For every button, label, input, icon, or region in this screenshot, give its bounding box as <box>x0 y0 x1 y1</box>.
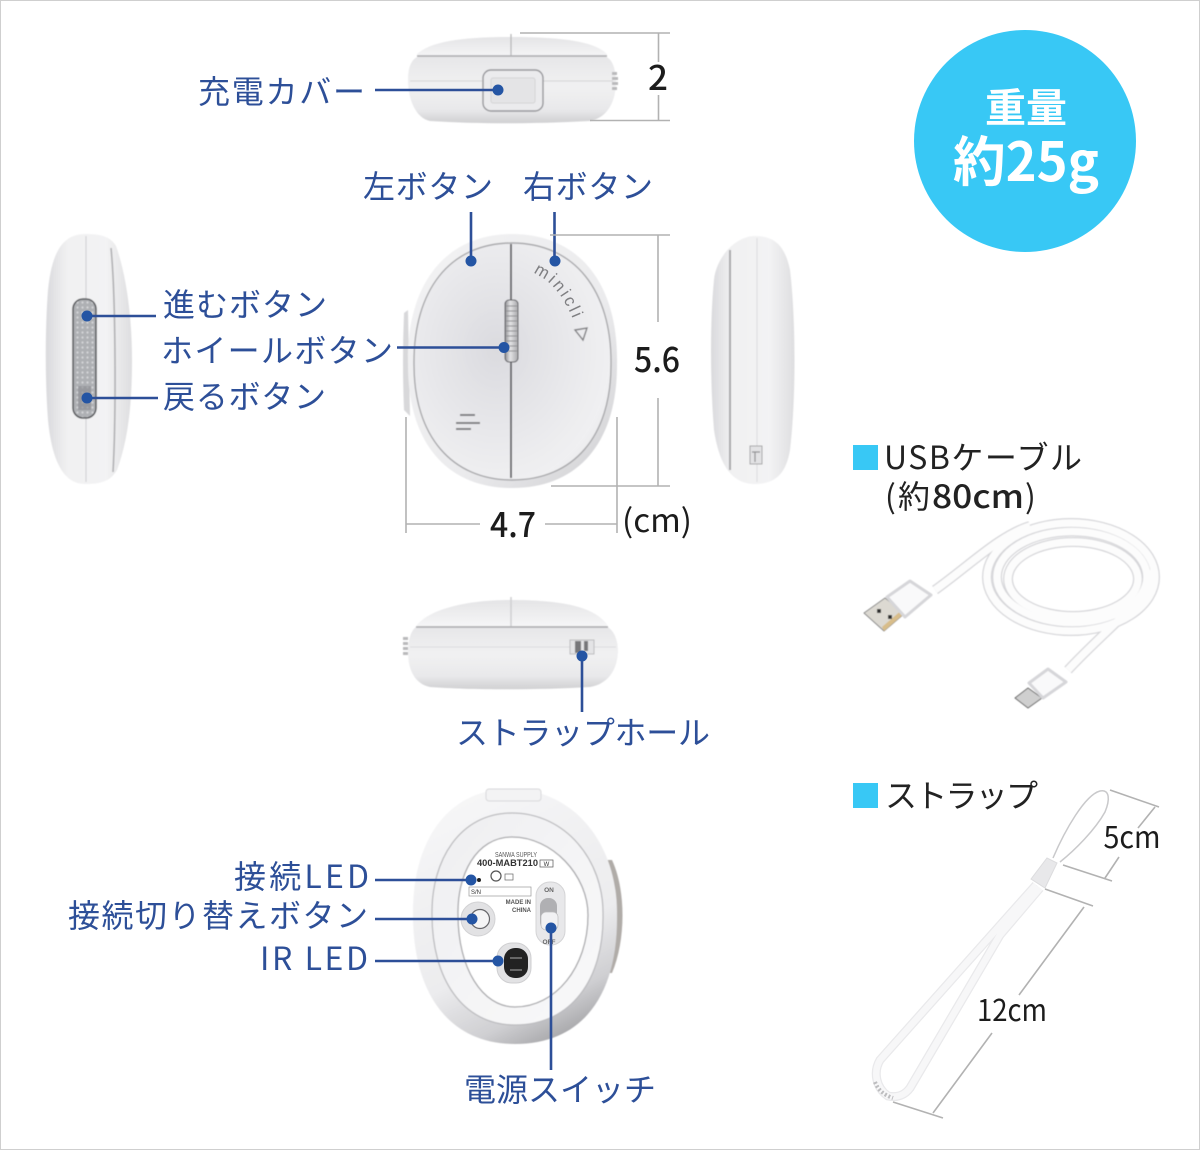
weight badge <box>914 30 1136 252</box>
dimension: width 4.7: 4.7 <box>490 498 536 547</box>
USB-C plug <box>1015 669 1066 708</box>
dimension: width 4.7: (cm) <box>622 496 692 542</box>
callout: forward, wheel, back buttons <box>82 280 510 418</box>
heading: USB cable: ) <box>1025 472 1036 518</box>
callout: strap hole <box>456 650 710 754</box>
callout: charging cover <box>198 67 504 113</box>
callout: charging cover: 充電カバー <box>198 67 365 113</box>
mouse side view: strap hole side <box>403 597 618 689</box>
callout: power switch <box>464 922 656 1111</box>
mouse right side view <box>711 236 794 484</box>
mouse top view <box>402 212 618 488</box>
callout: connection switch button: 接続切り替えボタン <box>68 891 368 937</box>
dimension: strap 12cm <box>893 889 1093 1118</box>
IR LED sensor <box>497 943 531 983</box>
mouse underside view: CHINA <box>512 908 532 914</box>
heading: USB cable: ( <box>885 472 896 518</box>
heading: USB cable <box>853 433 1082 518</box>
logo mark <box>456 415 480 429</box>
weight badge: 約25g <box>953 118 1099 197</box>
dimension: length 5.6 <box>550 235 680 486</box>
dimension: height 2: 2 <box>648 51 668 100</box>
labels: left and right buttons: 左ボタン <box>363 162 493 208</box>
callout: forward, wheel, back buttons: 進むボタン <box>163 280 327 326</box>
heading: USB cable: 80cm <box>932 472 1024 518</box>
callout: forward, wheel, back buttons: 戻るボタン <box>163 372 326 418</box>
side scroll window <box>73 299 96 418</box>
USB-A plug <box>864 581 931 631</box>
brand logo <box>533 273 576 327</box>
dimension: strap 12cm: 12cm <box>977 986 1047 1030</box>
mouse underside view: 400-MABT210 <box>477 858 538 868</box>
callout: connection LED <box>234 852 476 898</box>
power switch <box>536 882 565 945</box>
mouse top view: minicli <box>534 265 584 318</box>
mouse side view: charging cover side <box>408 34 618 123</box>
strap hole <box>570 640 594 654</box>
callout: power switch: 電源スイッチ <box>464 1065 656 1111</box>
dimension: strap 5cm: 5cm <box>1104 813 1160 857</box>
dimension: height 2 <box>520 33 670 120</box>
heading: strap: ストラップ <box>885 771 1038 817</box>
dimension: length 5.6: 5.6 <box>634 333 680 382</box>
mouse underside view: S/N <box>471 890 481 896</box>
product label: SANWA SUPPLY <box>495 852 537 859</box>
callout: IR LED: IR LED <box>260 934 368 980</box>
mouse underside view: W <box>544 862 550 868</box>
USB cable illustration <box>864 523 1155 708</box>
heading: USB cable: USBケーブル <box>884 433 1082 479</box>
dimension: strap 5cm <box>1063 790 1160 881</box>
mouse left side view <box>46 234 132 484</box>
labels: left and right buttons <box>363 162 653 208</box>
scroll wheel <box>505 300 518 362</box>
mouse underside view: OFF <box>542 939 556 946</box>
dimension: width 4.7 <box>406 417 692 547</box>
connection switch button <box>461 902 495 936</box>
brand logo triangle <box>575 328 587 340</box>
strap hole <box>750 446 762 464</box>
callout: strap hole: ストラップホール <box>456 708 710 754</box>
charging cover <box>483 70 543 111</box>
callout: forward, wheel, back buttons: ホイールボタン <box>161 326 393 372</box>
heading: USB cable: 約 <box>898 472 930 518</box>
button lines and dots <box>471 212 554 261</box>
callout: IR LED <box>260 934 504 980</box>
mouse underside view <box>413 789 622 1044</box>
mouse underside view: MADE IN <box>506 900 531 906</box>
strap illustration <box>875 791 1108 1098</box>
callout: connection LED: 接続LED <box>234 852 369 898</box>
labels: left and right buttons: 右ボタン <box>523 162 653 208</box>
mouse underside view: ON <box>544 887 554 894</box>
weight badge: 重量 <box>985 76 1067 134</box>
